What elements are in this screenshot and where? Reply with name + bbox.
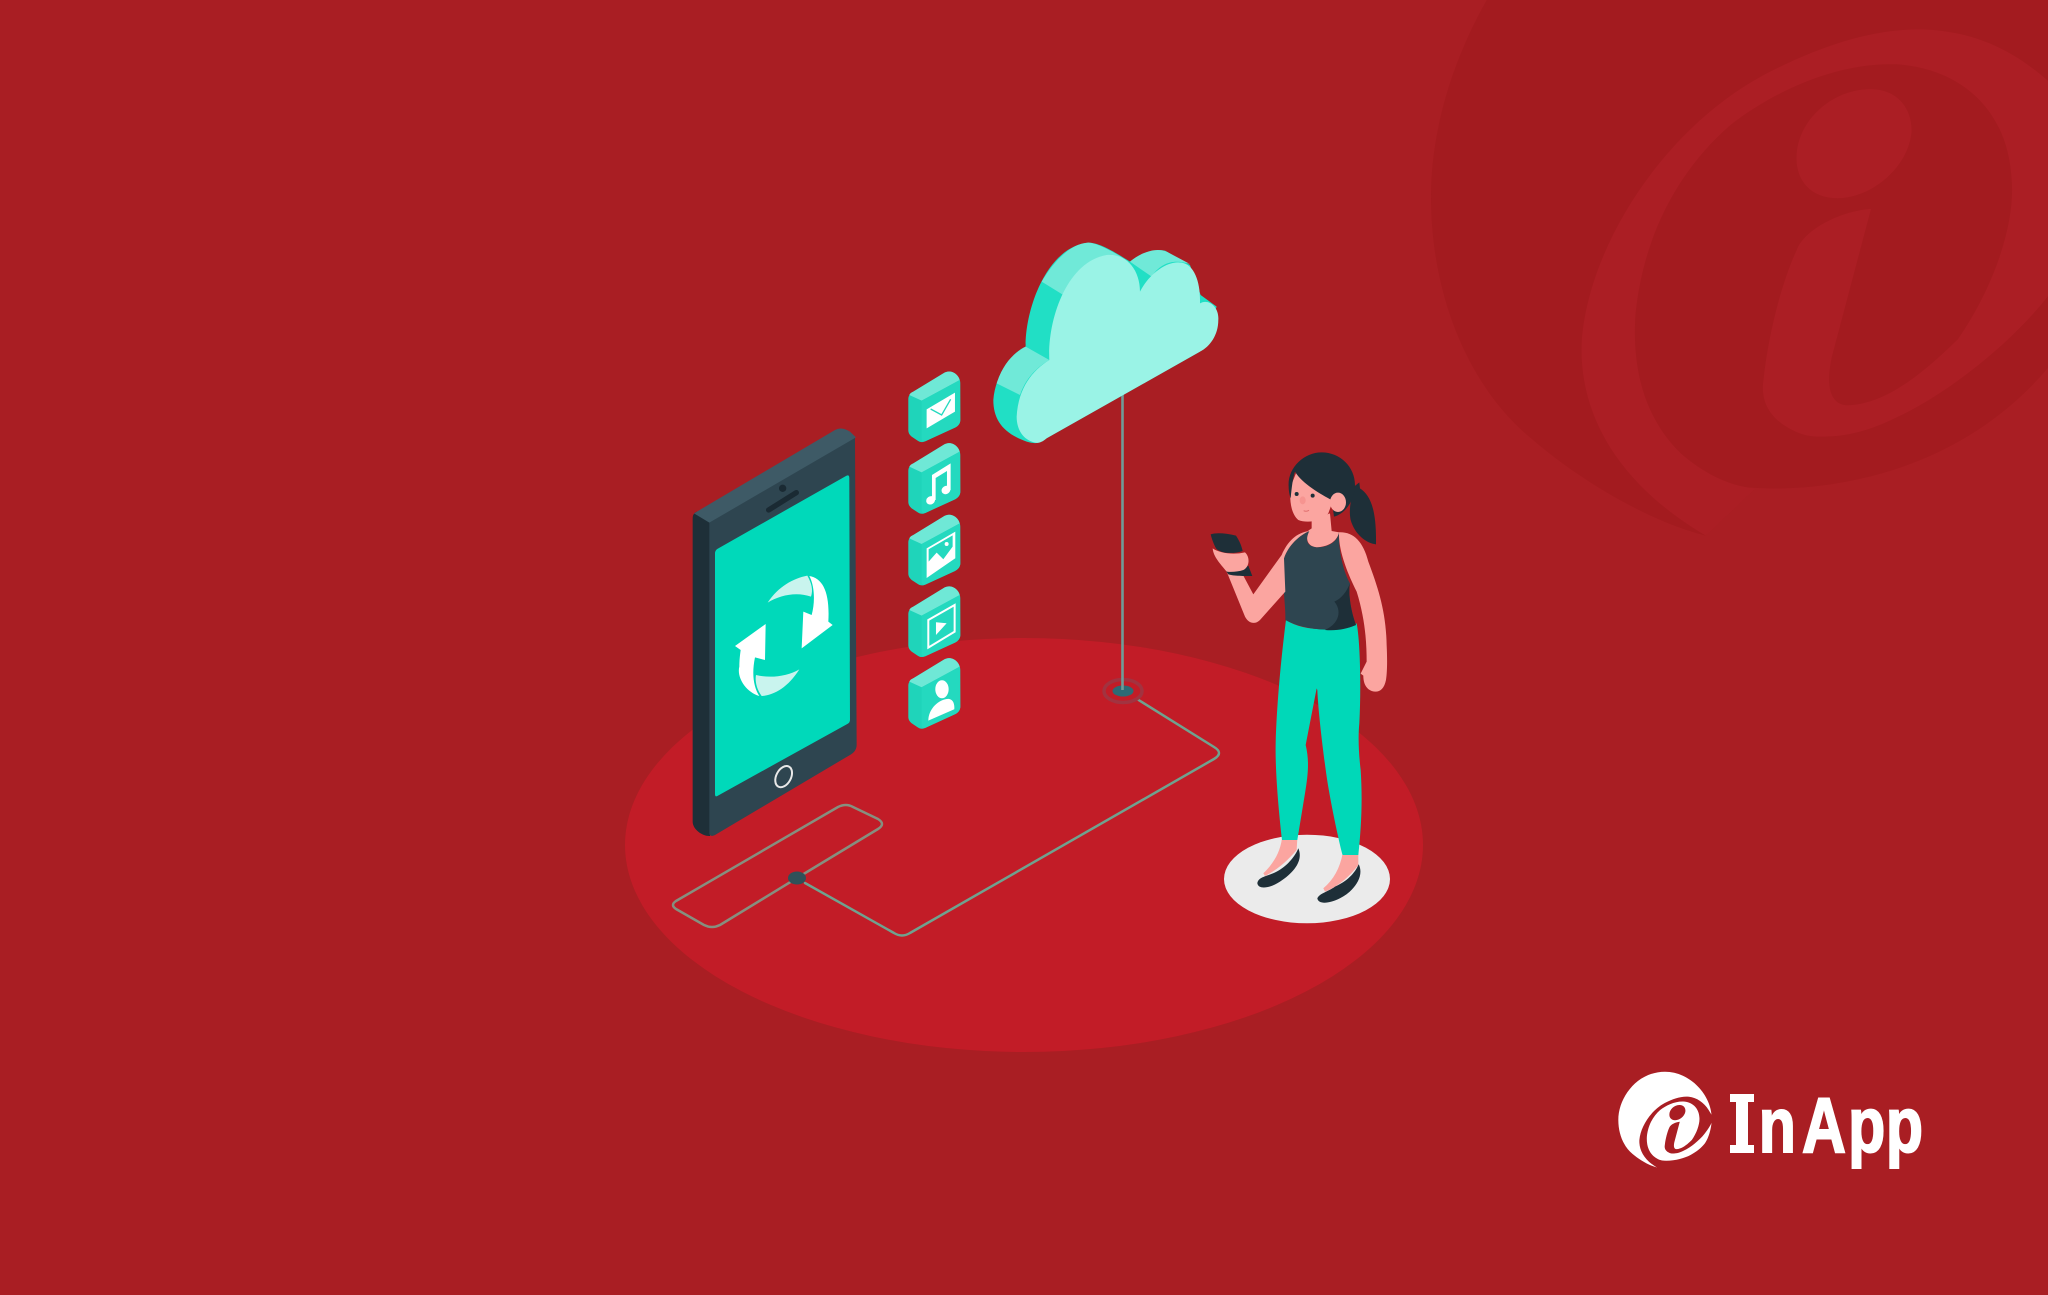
arrow two [735,624,766,696]
icon: video [908,586,960,657]
watermark: InApp logo mark [1431,0,2048,536]
far arm [1339,532,1387,692]
legs and shoes [1257,620,1362,903]
mouth [1304,509,1309,513]
inner dot [1112,686,1134,696]
cloud pole [1121,392,1124,690]
icon: picture [908,515,960,585]
logo swoosh [1639,1097,1713,1167]
wordmark stem [1736,1094,1748,1153]
phone top [694,428,856,523]
handheld phone [1211,533,1252,576]
watermark i dot [1796,89,1912,198]
cloud lit sides [997,243,1190,395]
smartphone [693,428,857,836]
watermark swoosh [1581,29,2048,536]
face [1290,472,1335,522]
phone screen [715,475,850,796]
wire from cloud base to node [805,699,1219,936]
ear [1330,493,1346,512]
phone front [709,437,857,836]
standing disc [1224,835,1390,923]
speaker [769,493,796,510]
hair [1289,452,1355,517]
neck and chest [1307,513,1339,547]
logo wordmark: InApp [1734,1082,1923,1169]
eyes [1295,492,1315,498]
home button [772,763,795,790]
shoes [1257,848,1360,903]
hand [1213,548,1249,572]
nose [1300,496,1306,504]
woman holding a phone [1211,452,1390,923]
InApp logo [1618,1072,1923,1169]
connector node [788,872,806,884]
logo mark [1618,1072,1713,1167]
tank top [1283,531,1356,630]
raised arm [1227,531,1309,623]
phone side [693,512,710,836]
icon: contact [908,658,960,729]
cloud dark side [993,243,1217,443]
outer ring [1104,680,1142,702]
wordmark serif bottom [1730,1145,1754,1153]
app icons column [908,371,960,729]
arrow one tail [768,576,812,603]
camera [779,485,786,492]
leggings [1276,620,1362,855]
arrow two tail [756,669,799,696]
upper body [1211,452,1387,692]
logo i dot [1669,1105,1685,1120]
watermark disc [1431,0,2048,536]
ponytail [1350,482,1376,544]
sync arrows [735,576,833,696]
icon: mail [908,371,960,442]
icon: music [908,443,960,514]
connector loop [673,805,882,927]
pole base ring [1104,680,1142,702]
cloud [993,243,1218,443]
floor ellipse [625,638,1423,1052]
tank top shadow [1325,583,1356,630]
arrow one [802,576,833,648]
feet [1263,838,1358,892]
cloud front face [1017,255,1218,443]
wordmark serif top [1730,1094,1754,1102]
circuit wire and connector loop [673,699,1219,936]
logo disc [1618,1072,1712,1167]
